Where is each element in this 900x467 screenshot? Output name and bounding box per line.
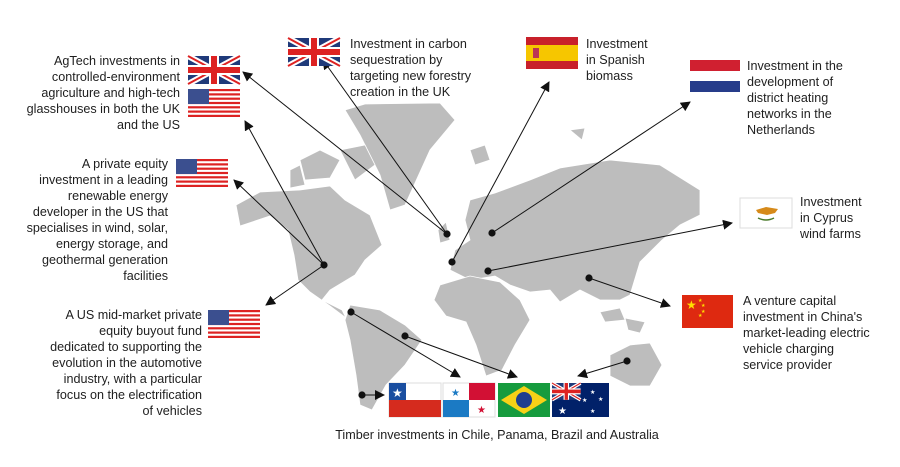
- callout: mid-market: equity buyout fund: [99, 324, 202, 338]
- arrows: [234, 60, 732, 395]
- callout: Cyprus: in Cyprus: [800, 211, 853, 225]
- callout: Spain: biomass: [586, 69, 633, 83]
- callout: AgTech: [27, 54, 181, 132]
- callout: private equity: [27, 157, 169, 283]
- callout: private equity: renewable energy: [68, 189, 169, 203]
- flags: timber row: [389, 383, 609, 417]
- flags: timber row: ★: [598, 396, 603, 403]
- callout: Netherlands: development of: [747, 75, 834, 89]
- callout: Netherlands: district heating: [747, 91, 828, 105]
- callout: Spain: Investment: [586, 37, 648, 51]
- flags: timber row: ★: [558, 406, 567, 417]
- world map: [236, 103, 700, 410]
- callout: Cyprus: [799, 195, 862, 241]
- callout: mid-market: industry, with a particular: [64, 372, 202, 386]
- flag: UK forestry: [288, 38, 340, 66]
- callout: Cyprus: wind farms: [799, 227, 861, 241]
- flag: China: ★: [686, 298, 697, 312]
- callout: AgTech: agriculture and high-tech: [41, 86, 180, 100]
- callout: China: [743, 294, 870, 372]
- callout: AgTech: and the US: [117, 118, 180, 132]
- callout: mid-market: [50, 308, 202, 418]
- callout: forestry: targeting new forestry: [350, 69, 472, 83]
- dots: [320, 229, 631, 399]
- flag: Cyprus: [740, 198, 792, 228]
- callout: Spain: in Spanish: [586, 53, 645, 67]
- callout: China: vehicle charging: [743, 342, 834, 356]
- flag: Spain: [526, 37, 578, 69]
- callout: Spain: [586, 37, 648, 83]
- callout: private equity: facilities: [123, 269, 168, 283]
- flags: timber row: ★: [590, 389, 595, 396]
- flag: China: ★: [698, 298, 703, 304]
- callout: private equity: geothermal generation: [42, 253, 168, 267]
- caption: timber: Timber investments in Chile, Panama, Brazil and Australia: [335, 428, 659, 442]
- callout: mid-market: focus on the electrification: [56, 388, 202, 402]
- callout: forestry: sequestration by: [350, 53, 443, 67]
- flag: China: [682, 295, 733, 328]
- callout: forestry: [350, 37, 472, 99]
- callout: forestry: Investment in carbon: [350, 37, 467, 51]
- flag: US mid-market: [208, 310, 260, 338]
- callout: Netherlands: Investment in the: [747, 59, 843, 73]
- flag: China: ★: [701, 303, 706, 309]
- callout: forestry: creation in the UK: [350, 85, 451, 99]
- callout: China: A venture capital: [743, 294, 836, 308]
- flag: China: ★: [701, 309, 706, 315]
- callout: China: service provider: [743, 358, 832, 372]
- flags: timber row: ★: [477, 405, 486, 416]
- flags: timber row: ★: [451, 388, 460, 399]
- callout: mid-market: dedicated to supporting the: [50, 340, 202, 354]
- callout: private equity: investment in a leading: [39, 173, 168, 187]
- flag: China: ★: [698, 313, 703, 319]
- flags: timber row: ★: [590, 408, 595, 415]
- callout: private equity: developer in the US that: [33, 205, 168, 219]
- callout: China: market-leading electric: [743, 326, 870, 340]
- callout: AgTech: AgTech investments in: [54, 54, 180, 68]
- callout: Netherlands: Netherlands: [747, 123, 815, 137]
- callout: private equity: energy storage, and: [56, 237, 168, 251]
- flag: Netherlands: [690, 60, 740, 92]
- flags: AgTech: [188, 56, 240, 117]
- flags: timber row: ★: [392, 386, 403, 400]
- callout: AgTech: controlled-environment: [52, 70, 180, 84]
- flag: US private equity: [176, 159, 228, 187]
- callout: private equity: A private equity: [82, 157, 169, 171]
- callout: mid-market: evolution in the automotive: [52, 356, 202, 370]
- callout: Cyprus: Investment: [800, 195, 862, 209]
- callout: AgTech: glasshouses in both the UK: [27, 102, 181, 116]
- callout: China: investment in China's: [743, 310, 862, 324]
- callout: Netherlands: [747, 59, 843, 137]
- flags: timber row: ★: [582, 397, 587, 404]
- callout: private equity: specialises in wind, solar,: [27, 221, 168, 235]
- callout: mid-market: of vehicles: [142, 404, 202, 418]
- callout: Netherlands: networks in the: [747, 107, 832, 121]
- callout: mid-market: A US mid-market private: [66, 308, 202, 322]
